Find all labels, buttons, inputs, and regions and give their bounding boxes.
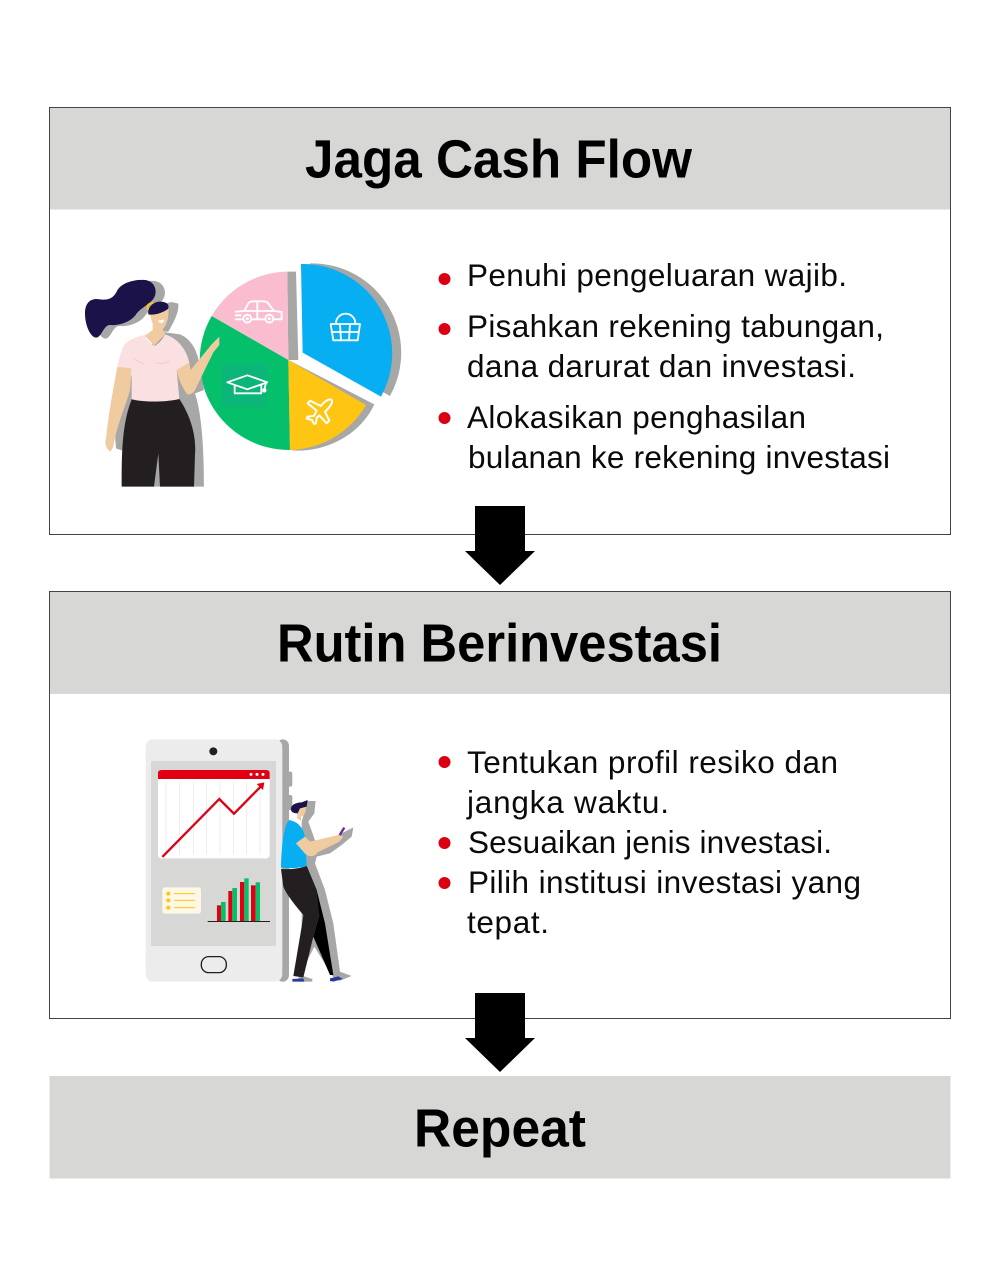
phone: [146, 739, 292, 982]
icon: basket: [331, 314, 360, 340]
bullet list: Rutin Berinvestasi: [438, 744, 861, 940]
bullet 3: Alokasikan penghasilan: [467, 399, 806, 435]
icon: airplane: [307, 399, 332, 424]
header band: Rutin Berinvestasi: [50, 592, 950, 694]
illustration: woman presenting pie chart: [85, 263, 401, 487]
bullet 3: [438, 399, 890, 475]
line chart window: [158, 770, 270, 858]
header band: Jaga Cash Flow: [50, 108, 950, 210]
heading: Jaga Cash Flow: Jaga Cash Flow: [305, 130, 692, 190]
bullet 2: [438, 308, 884, 384]
bullet 1: [438, 744, 838, 820]
bullet 1: Penuhi pengeluaran wajib.: [467, 257, 847, 293]
bar chart: [208, 878, 270, 921]
arrow: down to Repeat: [465, 993, 535, 1072]
panel: Jaga Cash Flow: [50, 108, 950, 534]
panel: Rutin Berinvestasi: [50, 592, 950, 1018]
bullet 1: Tentukan profil resiko dan: [467, 744, 838, 780]
bullet 2: Sesuaikan jenis investasi.: [468, 824, 832, 860]
bullet 2: Pisahkan rekening tabungan,: [467, 308, 884, 344]
heading: Rutin Berinvestasi: Rutin Berinvestasi: [277, 614, 722, 674]
icon: graduation cap: [227, 375, 267, 393]
bullet 1: jangka waktu.: [466, 784, 669, 820]
bullet 3: [438, 864, 861, 940]
icon: car: [236, 301, 282, 323]
illustration: phone with investment charts and man: [146, 739, 353, 982]
bullet 3: tepat.: [467, 904, 549, 940]
heading: Repeat: Repeat: [414, 1100, 586, 1158]
arrow: down to Rutin Berinvestasi: [465, 506, 535, 585]
man figure: [281, 800, 353, 982]
bullet list: Jaga Cash Flow: [438, 257, 890, 475]
bullet 3: Pilih institusi investasi yang: [468, 864, 861, 900]
pie chart: [200, 263, 401, 451]
woman figure: [85, 280, 219, 487]
list card: [162, 887, 201, 914]
bullet 3: bulanan ke rekening investasi: [468, 439, 890, 475]
panel: Repeat: [50, 1076, 950, 1178]
bullet 2: dana darurat dan investasi.: [467, 348, 856, 384]
